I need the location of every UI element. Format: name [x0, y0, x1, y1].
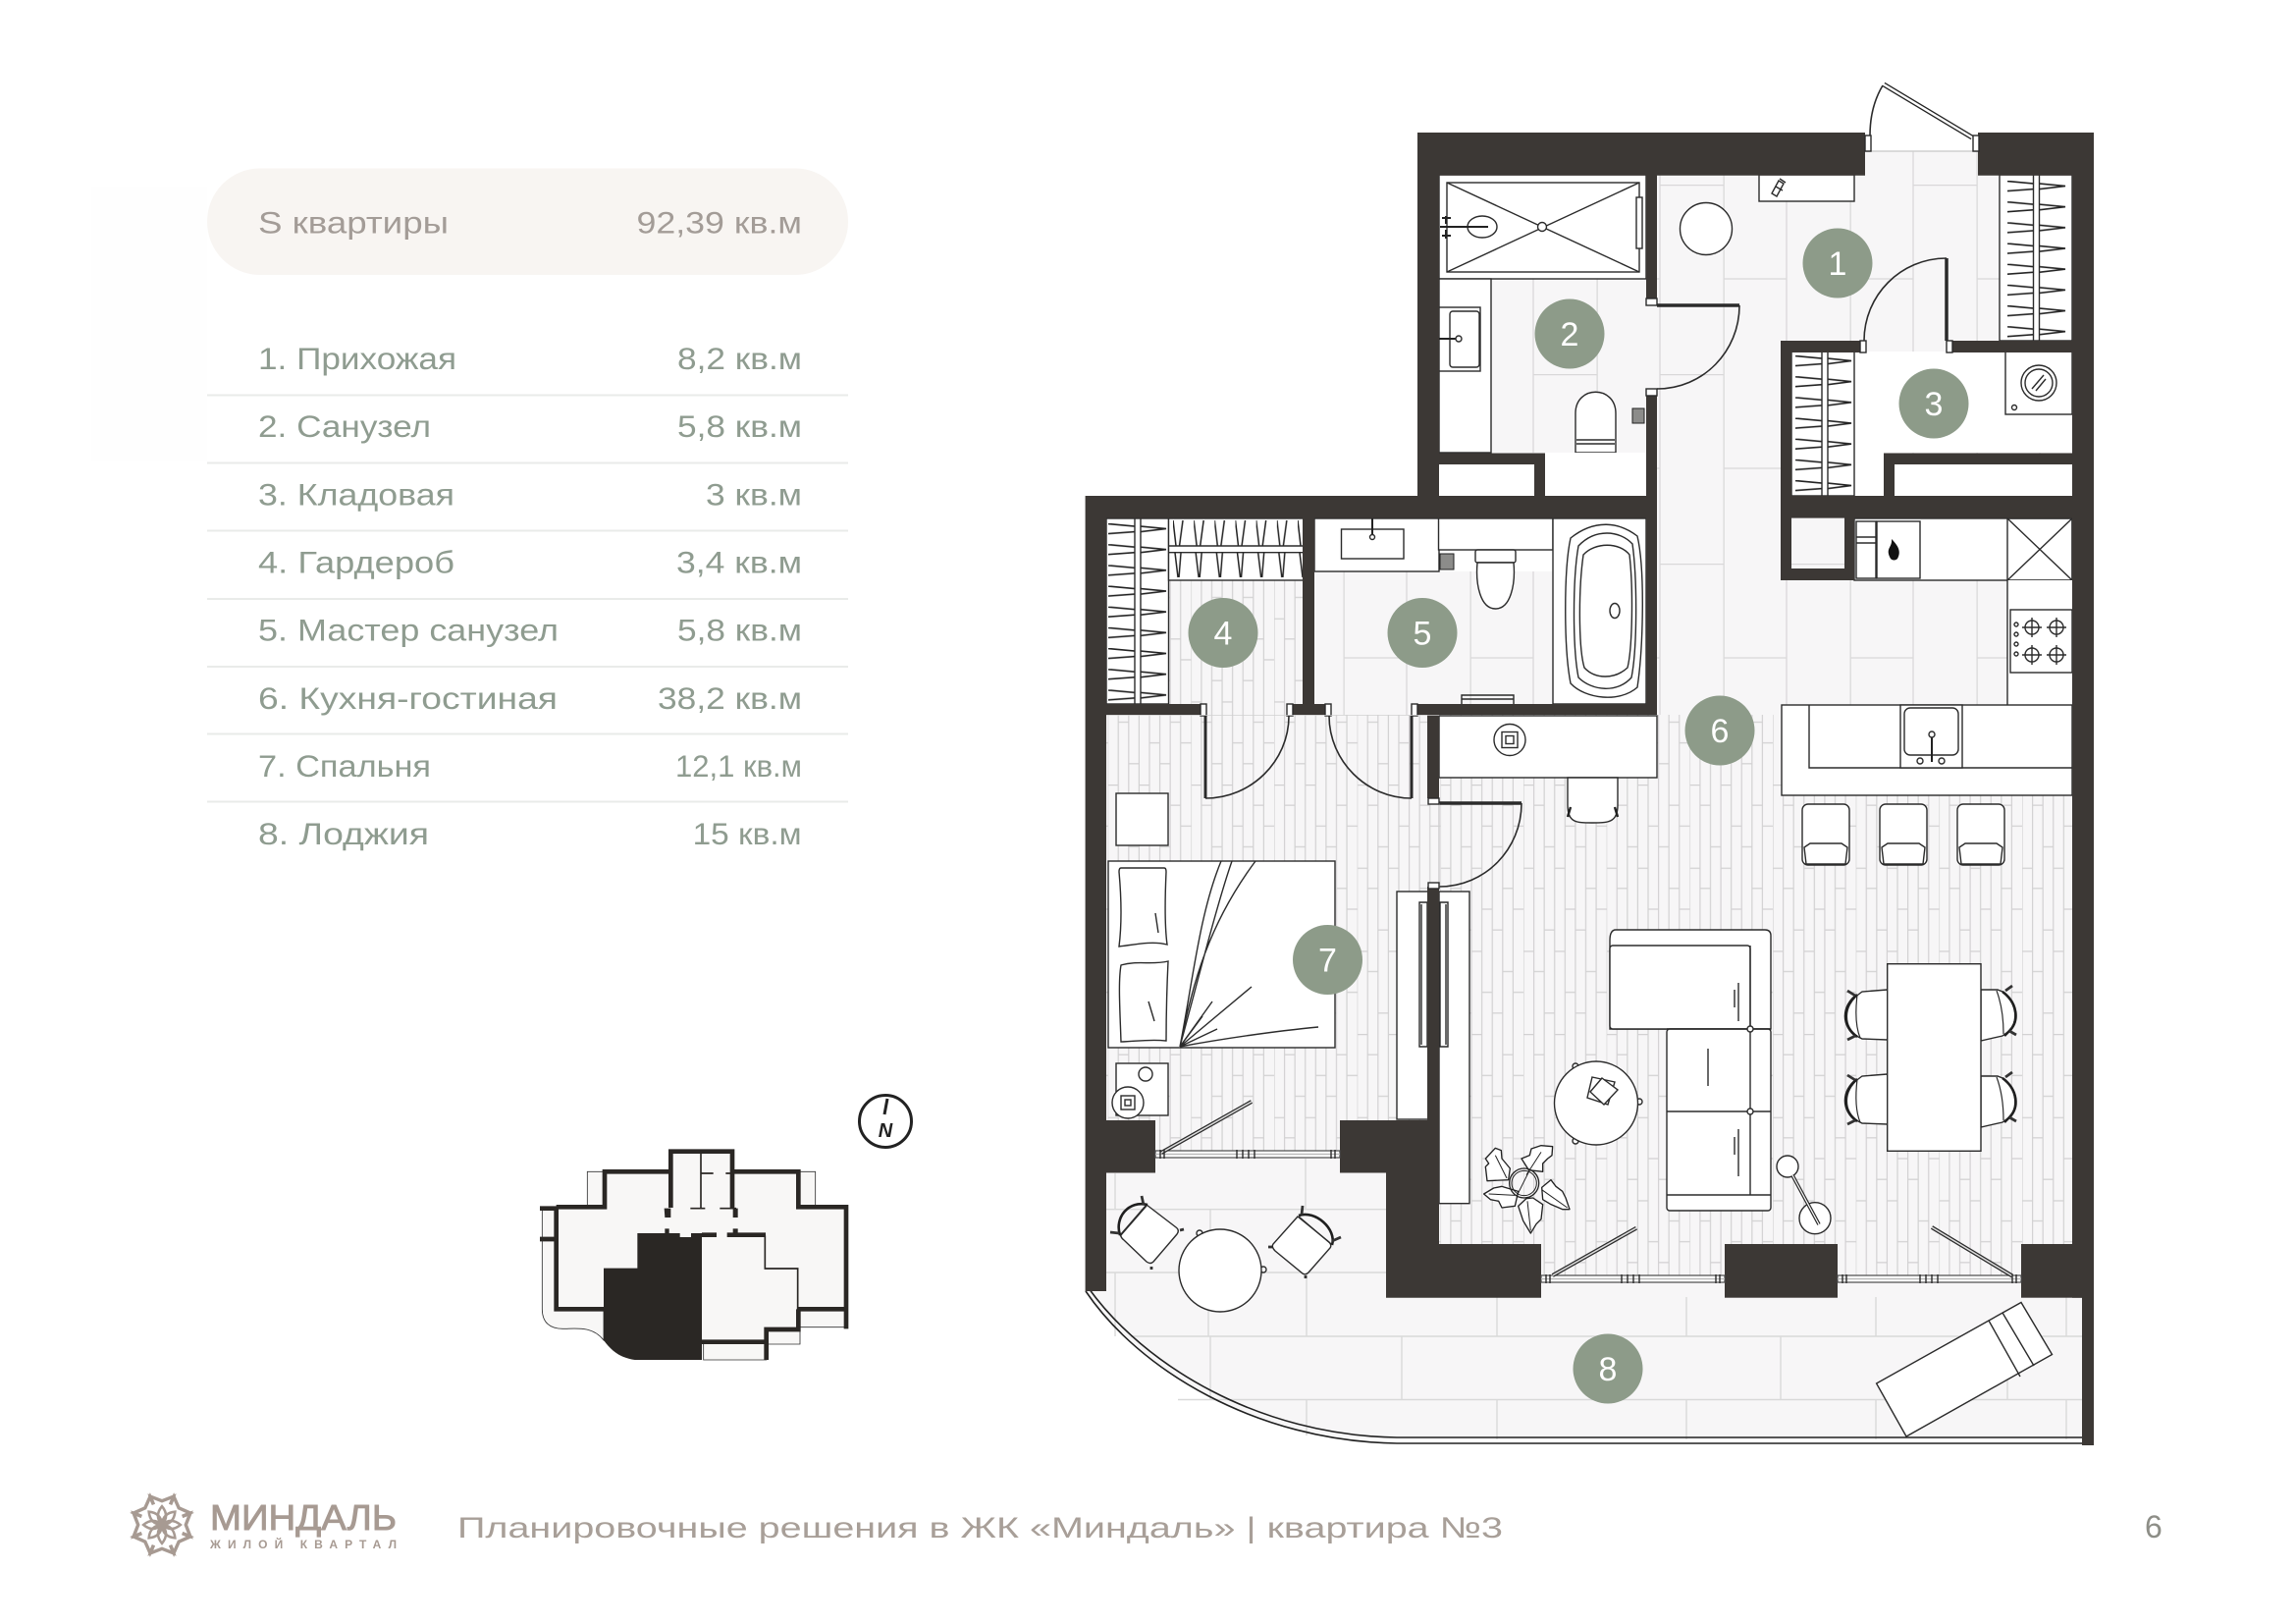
coffee table: [1555, 1061, 1642, 1145]
washing machine: [2005, 352, 2072, 414]
room area table: 7. Спальня: [258, 748, 431, 784]
kitchen hob: [2010, 610, 2072, 673]
bedroom nightstands: [1112, 793, 1168, 1118]
room area table: 12,1 кв.м: [675, 748, 802, 784]
room area table: 5,8 кв.м: [677, 613, 802, 648]
walls: [1086, 133, 2094, 1445]
entrance closet: [2000, 175, 2072, 341]
loggia table with chairs: [1110, 1196, 1341, 1312]
room area table: 5,8 кв.м: [677, 408, 802, 444]
room marker 8: [1573, 1333, 1643, 1404]
master bathroom: [1314, 518, 1646, 704]
room marker 6: 6: [1711, 713, 1729, 750]
bar stools: [1802, 804, 2004, 865]
dining table with chairs: [1845, 964, 2016, 1151]
sofa: [1610, 930, 1771, 1211]
room area table: 38,2 кв.м: [658, 680, 802, 716]
floor plan: [1086, 84, 2094, 1445]
room marker 6: [1684, 695, 1755, 766]
icon: almond flower: [133, 1496, 190, 1553]
room area table: 3,4 кв.м: [676, 544, 802, 579]
key plan of building floor: [540, 1152, 846, 1360]
room marker 4: 4: [1214, 615, 1232, 652]
sun lounger: [1877, 1302, 2052, 1436]
windows and balcony doors: [1155, 1102, 2021, 1283]
desk with lamp: [1439, 716, 1657, 778]
doors: [1106, 84, 1979, 889]
tv unit with tv: [1397, 892, 1469, 1204]
floor: tile zones: [1314, 151, 2072, 715]
room marker 4: [1188, 598, 1258, 668]
room area table: 4. Гардероб: [258, 544, 454, 579]
hall console: [1759, 175, 1854, 201]
shaft niches: [1439, 453, 1646, 496]
room area table: [207, 341, 848, 851]
room marker 3: 3: [1925, 386, 1943, 423]
bathroom vanity: [1439, 279, 1491, 453]
desk chair: [1568, 778, 1618, 823]
room marker 2: 2: [1561, 316, 1578, 353]
storeroom floor and closet: [1791, 352, 2072, 496]
room area table: 3 кв.м: [706, 477, 802, 513]
room area table: 2. Санузел: [258, 408, 431, 444]
room marker 8: 8: [1599, 1351, 1617, 1388]
icon: north compass: N: [879, 1120, 893, 1142]
footer caption: Планировочные решения в ЖК «Миндаль» | квартира №3: [457, 1512, 1503, 1544]
room marker 7: 7: [1318, 943, 1337, 980]
logo: ЖИЛОЙ КВАРТАЛ: [209, 1537, 397, 1551]
summary pill: apartment area: S квартиры: [258, 204, 449, 240]
kitchen upper counter: [1854, 518, 2072, 705]
room marker 7: [1293, 925, 1362, 995]
potted plant: [1484, 1146, 1570, 1233]
room marker 2: [1535, 298, 1604, 369]
icon: north compass: [860, 1096, 911, 1147]
page number: 6: [2145, 1509, 2163, 1544]
room area table: 15 кв.м: [693, 816, 802, 851]
room area table: 8,2 кв.м: [677, 341, 802, 376]
summary pill: apartment area: [207, 169, 848, 275]
wardrobe: closets: [1106, 518, 1304, 704]
room area table: 5. Мастер санузел: [258, 613, 559, 648]
bed: [1108, 861, 1335, 1048]
floor lamp: [1777, 1156, 1831, 1234]
faint watermark: [91, 187, 207, 461]
room area table: 3. Кладовая: [258, 477, 454, 513]
floor: parquet zones: [1106, 580, 2072, 1276]
bathroom toilet: [1575, 392, 1644, 453]
summary pill: apartment area: 92,39 кв.м: [636, 204, 802, 240]
room area table: 6. Кухня-гостиная: [258, 680, 558, 716]
room area table: 8. Лоджия: [258, 816, 429, 851]
room marker 3: [1898, 369, 1969, 438]
hall pouf: [1681, 202, 1732, 255]
room marker 1: [1802, 228, 1873, 298]
kitchen island with sink: [1782, 705, 2072, 795]
logo: [133, 1496, 397, 1553]
floor: loggia tile: [1086, 1157, 2082, 1443]
room area table: 1. Прихожая: [258, 341, 456, 376]
room marker 5: [1388, 598, 1457, 668]
room marker 1: 1: [1829, 245, 1846, 283]
shower cabin: [1439, 175, 1646, 279]
room marker 5: 5: [1414, 615, 1431, 652]
logo: МИНДАЛЬ: [210, 1497, 397, 1538]
